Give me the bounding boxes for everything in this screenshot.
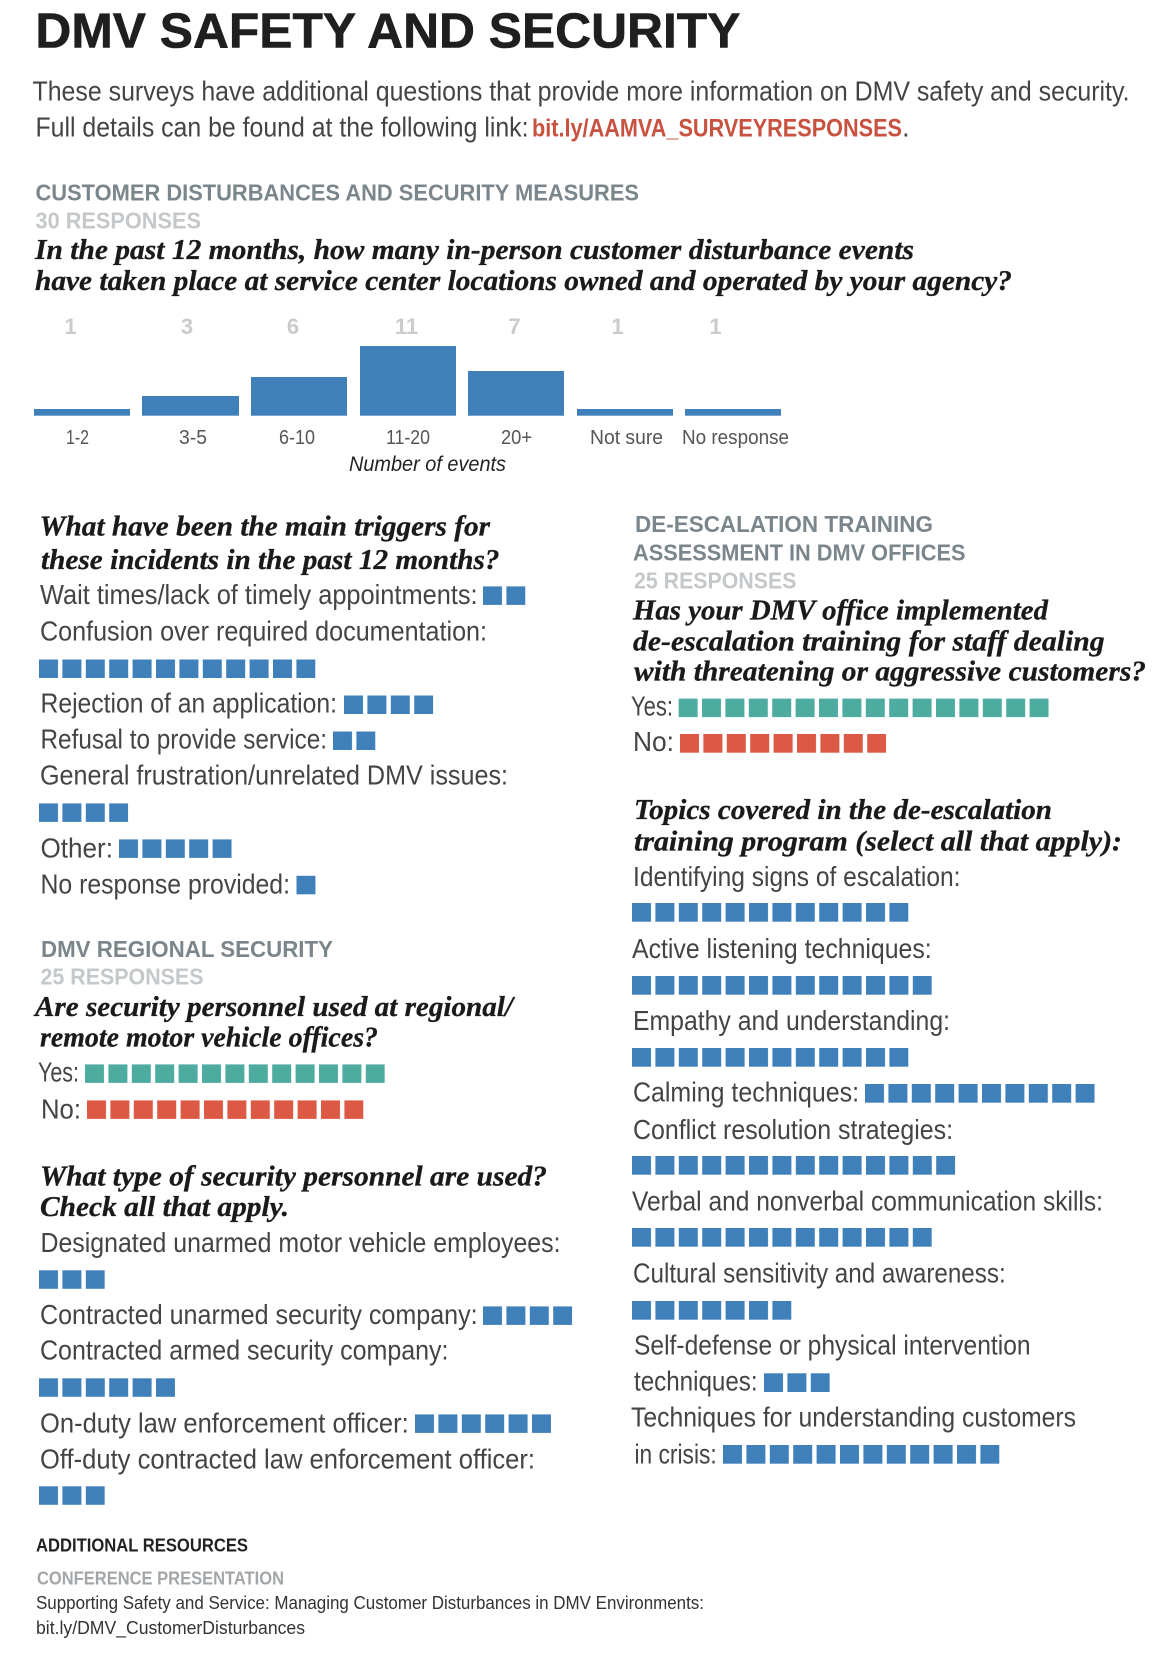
row: calming techniques <box>633 1077 1095 1108</box>
row: yes <box>631 691 1049 722</box>
row: customers in crisis <box>631 1402 1076 1469</box>
question: de-escalation training for staff dealing <box>633 627 1105 658</box>
row: conflict resolution <box>632 1114 955 1175</box>
row: designated unarmed employees <box>39 1227 560 1289</box>
conference presentation label: CONFERENCE PRESENTATION <box>37 1567 284 1588</box>
question <box>40 1161 547 1223</box>
question: Check all that apply. <box>40 1192 289 1223</box>
row: no <box>633 726 886 757</box>
presentation title: Supporting Safety and Service: Managing Customer Disturbances in DMV Environments: <box>36 1592 704 1613</box>
section heading: DMV REGIONAL SECURITY <box>41 936 333 962</box>
panel: type of security personnel <box>39 1161 572 1505</box>
bar values: 11 <box>395 314 418 339</box>
question <box>632 595 1146 688</box>
row: customers in crisis: Techniques for understanding customers <box>631 1402 1076 1433</box>
panel: training topics <box>631 795 1122 1469</box>
row: designated unarmed employees: Designated unarmed motor vehicle employees: <box>40 1227 560 1258</box>
question <box>634 795 1122 858</box>
row: empathy: Empathy and understanding: <box>633 1005 950 1036</box>
row: self-defense <box>634 1329 1031 1397</box>
axis categories: 3-5 <box>179 427 207 449</box>
row: cultural sensitivity <box>632 1257 1006 1320</box>
bar values: 7 <box>508 314 521 339</box>
question: What type of security personnel are used? <box>40 1161 547 1192</box>
question <box>33 992 515 1054</box>
row: self-defense: Self-defense or physical intervention <box>634 1329 1031 1360</box>
row: no: No: <box>41 1093 81 1124</box>
panel: de-escalation training assessment <box>631 511 1146 757</box>
bars <box>34 346 781 416</box>
axis categories: 20+ <box>501 427 532 449</box>
bar values: 3 <box>181 314 193 339</box>
row: on-duty law enforcement: On-duty law enforcement officer: <box>40 1408 409 1439</box>
panel: customer disturbances and security measures <box>34 180 1012 476</box>
intro text: Full details can be found at the following link: <box>36 112 528 143</box>
response count: 25 RESPONSES <box>634 568 796 594</box>
question: Topics covered in the de-escalation <box>634 795 1052 826</box>
row: no <box>41 1093 363 1124</box>
row: identifying signs: Identifying signs of escalation: <box>633 861 960 892</box>
panel: main triggers <box>39 512 525 900</box>
bar values: 1 <box>611 314 624 339</box>
title: DMV SAFETY AND SECURITY <box>35 5 740 59</box>
row: general frustration: General frustration/unrelated DMV issues: <box>40 760 508 791</box>
axis categories: Not sure <box>590 427 663 449</box>
resources heading: ADDITIONAL RESOURCES <box>36 1534 248 1556</box>
row: contracted armed <box>39 1334 448 1397</box>
intro text: . <box>902 112 910 143</box>
row: no: No: <box>633 726 674 757</box>
row: active listening: Active listening techniques: <box>632 933 932 964</box>
section heading: ASSESSMENT IN DMV OFFICES <box>633 539 966 565</box>
bar chart: number of events <box>34 314 789 476</box>
row: verbal and nonverbal: Verbal and nonverbal communication skills: <box>632 1186 1103 1217</box>
response count: 25 RESPONSES <box>40 963 204 989</box>
bar values <box>64 314 722 339</box>
row: empathy <box>632 1005 950 1067</box>
question: In the past 12 months, how many in-person customer disturbance events <box>34 235 914 266</box>
question: What have been the main triggers for <box>40 512 491 542</box>
question: training program (select all that apply): <box>634 826 1122 858</box>
row: yes: Yes: <box>38 1057 79 1088</box>
axis categories <box>66 427 789 449</box>
question <box>40 512 500 576</box>
row: confusion over documentation <box>39 615 487 678</box>
panel: DMV regional security <box>33 936 515 1124</box>
question: these incidents in the past 12 months? <box>41 545 500 576</box>
bar values: 1 <box>709 314 722 339</box>
response count: 30 RESPONSES <box>36 208 201 234</box>
question: Has your DMV office implemented <box>632 595 1049 626</box>
row: customers in crisis: in crisis: <box>634 1438 717 1469</box>
row: other <box>40 832 232 863</box>
row: self-defense: techniques: <box>634 1366 758 1397</box>
axis categories: 11-20 <box>386 427 430 449</box>
bar values: 1 <box>64 314 77 339</box>
row: wait times: Wait times/lack of timely appointments: <box>40 579 478 610</box>
row: contracted armed: Contracted armed security company: <box>40 1334 448 1365</box>
section heading: DE-ESCALATION TRAINING <box>635 511 933 537</box>
row: confusion over documentation: Confusion over required documentation: <box>40 615 487 646</box>
intro text <box>32 76 1130 143</box>
axis categories: No response <box>682 427 789 449</box>
presentation link: bit.ly/DMV_CustomerDisturbances <box>36 1617 305 1639</box>
axis categories: 1-2 <box>66 427 89 449</box>
row: other: Other: <box>40 832 113 863</box>
row: calming techniques: Calming techniques: <box>633 1077 859 1108</box>
row: rejection: Rejection of an application: <box>40 688 337 719</box>
row: no response: No response provided: <box>40 869 290 900</box>
axis title: Number of events <box>349 453 506 476</box>
intro text: bit.ly/AAMVA_SURVEYRESPONSES <box>532 115 902 143</box>
panel: additional resources <box>36 1534 704 1639</box>
row: off-duty law enforcement <box>39 1444 535 1505</box>
bar values: 6 <box>287 314 299 339</box>
row: refusal: Refusal to provide service: <box>40 724 327 755</box>
question: remote motor vehicle offices? <box>40 1023 378 1054</box>
row: yes <box>38 1057 385 1088</box>
row: conflict resolution: Conflict resolution strategies: <box>633 1114 953 1145</box>
question: with threatening or aggressive customers? <box>634 656 1146 688</box>
section heading <box>633 511 966 565</box>
row: contracted unarmed: Contracted unarmed security company: <box>40 1299 478 1330</box>
row: yes: Yes: <box>631 691 673 722</box>
row: general frustration <box>39 760 508 822</box>
axis categories: 6-10 <box>279 427 315 449</box>
row: identifying signs <box>632 861 960 922</box>
row: active listening <box>632 933 932 995</box>
row: cultural sensitivity: Cultural sensitivity and awareness: <box>633 1257 1006 1288</box>
question: Are security personnel used at regional/ <box>33 992 515 1023</box>
section heading: CUSTOMER DISTURBANCES AND SECURITY MEASURES <box>36 180 639 206</box>
row: off-duty law enforcement: Off-duty contracted law enforcement officer: <box>40 1444 535 1474</box>
row: verbal and nonverbal <box>632 1186 1103 1247</box>
question <box>34 235 1012 297</box>
question: have taken place at service center locations owned and operated by your agency? <box>35 266 1012 297</box>
